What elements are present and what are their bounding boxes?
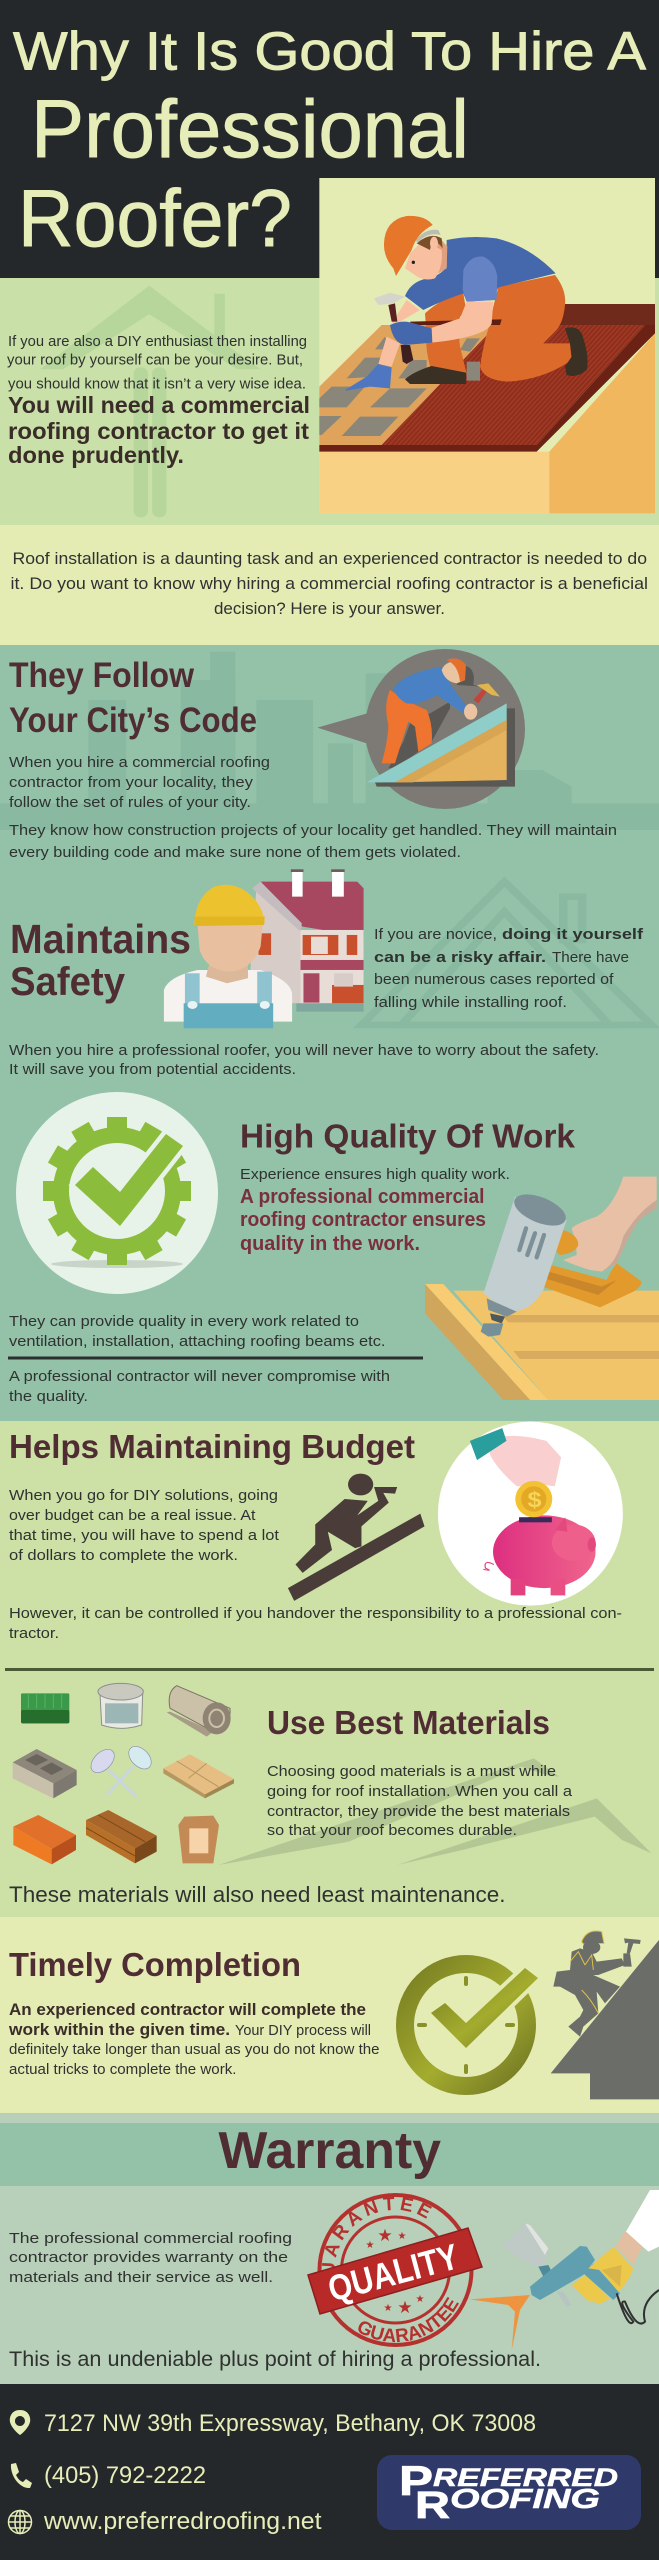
- text: city code: follow the set of rules of your city.: [9, 794, 251, 811]
- text: budget: that time, you will have to spend a lot: [9, 1527, 280, 1544]
- text: quality callout: quality in the work.: [240, 1232, 420, 1255]
- icon: nails: [87, 1742, 156, 1797]
- text: safety: [9, 926, 644, 1078]
- text: safety: doing it yourself: [502, 926, 644, 943]
- text: safety: There have: [552, 949, 629, 966]
- icon: quality guarantee stamp: ★: [398, 2231, 407, 2242]
- logo: Preferred Roofing: REFERRED: [433, 2464, 618, 2492]
- icon: nail gun on wooden boards: [425, 1177, 659, 1400]
- text: materials: going for roof installation. When you call a: [267, 1783, 573, 1800]
- heading: Maintains Safety: [10, 916, 191, 1004]
- text: timely completion: definitely take longer than usual as you do not know the: [9, 2042, 380, 2058]
- title: Professional: [31, 84, 469, 175]
- text: budget: [9, 1487, 622, 1642]
- text: warranty: [9, 2230, 541, 2371]
- footer: contact details: (405) 792-2222: [44, 2462, 206, 2489]
- heading: Warranty: Warranty: [218, 2122, 441, 2180]
- title: Why It Is Good To Hire A: [13, 22, 646, 82]
- icon: piggy bank with coin: $: [527, 1488, 541, 1512]
- icon: quality guarantee stamp: ★: [377, 2226, 393, 2245]
- logo: Preferred Roofing: P: [399, 2457, 433, 2504]
- icon: tiles: [163, 1754, 234, 1798]
- lead paragraph: decision? Here is your answer.: [214, 599, 445, 618]
- icon: worker on roof in speech bubble: [317, 649, 525, 809]
- icon: quality guarantee stamp: QUALITY: [324, 2235, 463, 2309]
- text: warranty: contractor provides warranty on the: [9, 2249, 288, 2266]
- background: faint city skyline: [0, 652, 659, 830]
- icon: clock with check mark: [405, 1964, 538, 2086]
- text: quality callout: [240, 1166, 510, 1255]
- text: budget: of dollars to complete the work.: [9, 1547, 238, 1564]
- text: materials: Choosing good materials is a must while: [267, 1763, 556, 1780]
- intro text: you should know that it isn’t a very wise idea.: [8, 376, 306, 392]
- footer: contact details: [8, 2410, 536, 2535]
- lead paragraph: Roof installation is a daunting task and an experienced contractor is needed to do: [12, 549, 647, 568]
- icon: roofer silhouette on gray house: [551, 1931, 659, 2099]
- text: quality callout: roofing contractor ensures: [240, 1208, 486, 1231]
- text: warranty: This is an undeniable plus point of hiring a professional.: [9, 2348, 541, 2371]
- text: warranty: materials and their service as well.: [9, 2269, 273, 2286]
- heading: They Follow Your City's Code: [9, 656, 257, 740]
- text: city code: [9, 754, 617, 861]
- icon: house behind worker with hard hat: [164, 869, 364, 1028]
- heading: Use Best Materials: Use Best Materials: [267, 1704, 550, 1741]
- icon: quality guarantee stamp: ★: [366, 2240, 375, 2251]
- icon: brick: [13, 1815, 76, 1864]
- icon: globe: [8, 2510, 32, 2534]
- icon: quality guarantee stamp: ★: [397, 2298, 413, 2317]
- icon: faint house watermark: [40, 286, 261, 517]
- heading: Maintains Safety: Maintains: [10, 916, 191, 962]
- text: budget: When you go for DIY solutions, going: [9, 1487, 278, 1504]
- logo: Preferred Roofing: R: [415, 2485, 450, 2527]
- logo: Preferred Roofing: OOFING: [450, 2483, 600, 2514]
- text: timely completion: work within the given time.: [8, 2020, 230, 2039]
- text: city code: contractor from your locality, they: [9, 774, 254, 791]
- icon: gear with check mark: [16, 1092, 218, 1294]
- intro text: [7, 333, 310, 468]
- icon: insulation roll: [167, 1686, 231, 1737]
- text: safety: If you are novice,: [374, 926, 497, 943]
- divider rule: [5, 1668, 654, 1671]
- heading: Maintains Safety: Safety: [10, 960, 126, 1004]
- text: materials: so that your roof becomes durable.: [267, 1822, 517, 1839]
- icon: quality guarantee stamp: ★: [384, 2303, 393, 2314]
- text: materials: [9, 1763, 573, 1907]
- footer: contact details: 7127 NW 39th Expressway, Bethany, OK 73008: [44, 2410, 536, 2437]
- text: quality detail: ventilation, installation, attaching roofing beams etc.: [9, 1333, 386, 1350]
- heading: High Quality Of Work: High Quality Of Work: [240, 1118, 576, 1154]
- icons: roofing materials: [13, 1683, 234, 1864]
- heading: They Follow Your City's Code: Your City’s Code: [9, 701, 257, 740]
- icon: hammering figure pictogram: [288, 1474, 425, 1601]
- text: safety: can be a risky affair.: [374, 949, 546, 966]
- icon: quality guarantee stamp: [307, 2193, 483, 2347]
- heading: They Follow Your City's Code: They Follow: [9, 656, 195, 695]
- text: timely completion: An experienced contractor will complete the: [9, 2000, 366, 2019]
- intro text: your roof by yourself can be your desire. But,: [7, 352, 303, 368]
- icon: cement bag: [178, 1816, 219, 1863]
- icon: quality guarantee stamp: GUARANTEE: [358, 2296, 459, 2342]
- text: quality callout: A professional commercial: [240, 1185, 484, 1208]
- icon: lumber: [86, 1810, 157, 1863]
- text: city code: every building code and make sure none of them gets violated.: [9, 844, 461, 861]
- text: budget: over budget can be a real issue. At: [9, 1507, 256, 1524]
- text: quality detail: They can provide quality in every work related to: [9, 1313, 359, 1330]
- text: materials: contractor, they provide the best materials: [267, 1803, 570, 1820]
- text: quality detail: [8, 1313, 423, 1405]
- icon: quality guarantee stamp: GUARANTEE: [322, 2197, 432, 2267]
- icon: location pin: [10, 2410, 30, 2435]
- text: safety: falling while installing roof.: [374, 994, 567, 1011]
- footer: contact details: www.preferredroofing.net: [43, 2508, 322, 2535]
- text: safety: When you hire a professional roofer, you will never have to worry about the safety.: [9, 1042, 599, 1059]
- text: timely completion: Your DIY process will: [235, 2023, 371, 2039]
- icon: phone: [11, 2463, 32, 2488]
- text: safety: It will save you from potential accidents.: [9, 1061, 296, 1078]
- intro text: roofing contractor to get it: [8, 418, 309, 444]
- text: budget: However, it can be controlled if you handover the responsibility to a professional con-: [9, 1605, 622, 1622]
- icon: quality guarantee stamp: ★: [416, 2294, 425, 2305]
- lead paragraph: [10, 549, 648, 618]
- intro text: You will need a commercial: [8, 392, 310, 418]
- text: quality detail: the quality.: [9, 1388, 88, 1405]
- text: timely completion: [8, 2000, 380, 2078]
- intro text: If you are also a DIY enthusiast then installing: [8, 333, 307, 350]
- text: city code: They know how construction projects of your locality get handled. They will maintain: [9, 822, 617, 839]
- text: quality callout: Experience ensures high quality work.: [240, 1166, 510, 1183]
- heading: Timely Completion: Timely Completion: [9, 1946, 301, 1983]
- lead paragraph: it. Do you want to know why hiring a commercial roofing contractor is a beneficial: [10, 574, 648, 593]
- text: timely completion: actual tricks to complete the work.: [9, 2062, 236, 2078]
- icon: paint bucket: [98, 1683, 143, 1728]
- text: materials: These materials will also need least maintenance.: [9, 1882, 506, 1907]
- icon: shingle: [21, 1693, 69, 1723]
- heading: Helps Maintaining Budget: Helps Maintaining Budget: [9, 1428, 415, 1465]
- text: warranty: The professional commercial roofing: [9, 2230, 292, 2247]
- icon: piggy bank with coin: [438, 1422, 623, 1606]
- text: city code: When you hire a commercial roofing: [9, 754, 270, 771]
- icon: roof shadow: [219, 1758, 651, 1865]
- title: Roofer?: [18, 174, 292, 264]
- text: safety: been numerous cases reported of: [374, 971, 614, 988]
- background: faint house outline: [361, 882, 651, 1025]
- text: quality detail: A professional contractor will never compromise with: [9, 1368, 390, 1385]
- icon: spray gun with hand: [470, 2190, 659, 2350]
- icon: concrete block: [13, 1749, 77, 1798]
- intro text: done prudently.: [8, 442, 184, 468]
- intro illustration: roofer on a roof: [319, 178, 655, 513]
- text: budget: tractor.: [9, 1625, 59, 1642]
- logo: Preferred Roofing: [377, 2455, 641, 2530]
- title: [13, 22, 646, 264]
